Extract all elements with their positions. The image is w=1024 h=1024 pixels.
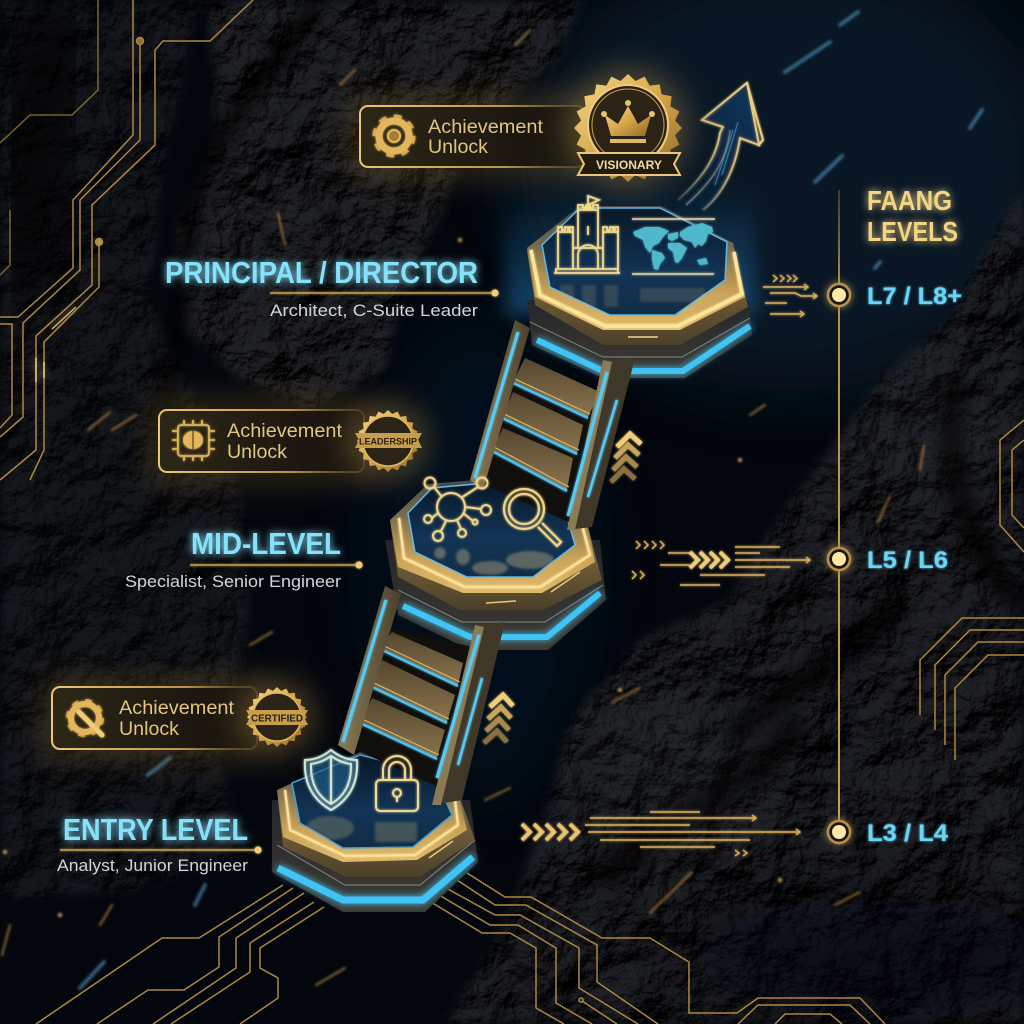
heading: faang levels: LEVELS [867, 216, 958, 247]
heading: faang levels: FAANG [867, 185, 952, 216]
icon: world map [632, 219, 715, 274]
timeline line [838, 190, 840, 820]
growth arrow [678, 83, 763, 210]
lower staircase [338, 586, 505, 805]
heading: entry level: ENTRY LEVEL [63, 812, 248, 847]
badge: visionary [566, 66, 690, 190]
badge: certified: CERTIFIED [251, 714, 303, 724]
badge: visionary: VISIONARY [596, 158, 662, 172]
badge: leadership [346, 399, 430, 483]
text: achievement unlock: Achievement [119, 698, 235, 719]
platform: principal / director [505, 190, 755, 378]
heading: faang levels [867, 185, 958, 247]
text: achievement unlock [119, 698, 235, 740]
node: L5 / L6 [828, 548, 850, 570]
badge: leadership: LEADERSHIP [359, 436, 418, 448]
icon: network nodes [424, 478, 491, 541]
connector: mid-level [190, 562, 362, 568]
connector: principal [270, 290, 498, 296]
icon: gear [376, 118, 412, 154]
text: achievement unlock: Achievement [428, 117, 544, 138]
node: L3 / L4 [828, 821, 850, 843]
achievement panel: certified [38, 673, 268, 763]
icon: gear and wrench [69, 702, 102, 735]
platform: entry level [272, 752, 478, 912]
icon: padlock [376, 756, 418, 811]
platform: mid-level [385, 476, 606, 650]
up chevrons: upper stairs [611, 434, 641, 482]
icon: shield [305, 750, 357, 810]
text: achievement unlock: Unlock [227, 442, 288, 463]
label: L7 / L8+: L7 / L8+ [867, 283, 962, 310]
up chevrons: lower stairs [484, 695, 513, 743]
achievement panel: leadership [145, 396, 375, 486]
upper staircase [470, 320, 635, 530]
speed lines: L3 / L4 [522, 812, 800, 856]
speed lines: L5 / L6 [632, 541, 810, 585]
heading: principal / director: PRINCIPAL / DIRECTOR [165, 255, 478, 290]
speed lines: L7 / L8+ [763, 275, 817, 317]
subtitle: entry level: Analyst, Junior Engineer [57, 856, 248, 875]
node: L7 / L8+ [828, 284, 850, 306]
achievement panel: visionary [345, 92, 595, 182]
heading: mid-level: MID-LEVEL [191, 526, 341, 561]
subtitle: principal: Architect, C-Suite Leader [270, 301, 478, 320]
label: L5 / L6: L5 / L6 [867, 547, 948, 574]
text: achievement unlock: Unlock [119, 719, 180, 740]
connector: entry level [60, 846, 262, 854]
label: L3 / L4: L3 / L4 [867, 820, 949, 847]
text: achievement unlock [428, 117, 544, 158]
icon: castle [554, 196, 620, 273]
faang level track [828, 185, 962, 847]
circuit glints [36, 307, 76, 382]
text: achievement unlock [227, 421, 343, 463]
icon: brain chip [172, 420, 215, 461]
subtitle: mid-level: Specialist, Senior Engineer [125, 572, 341, 591]
badge: certified [237, 677, 317, 757]
icon: magnifier [504, 489, 561, 546]
text: achievement unlock: Unlock [428, 137, 489, 158]
text: achievement unlock: Achievement [227, 421, 343, 442]
